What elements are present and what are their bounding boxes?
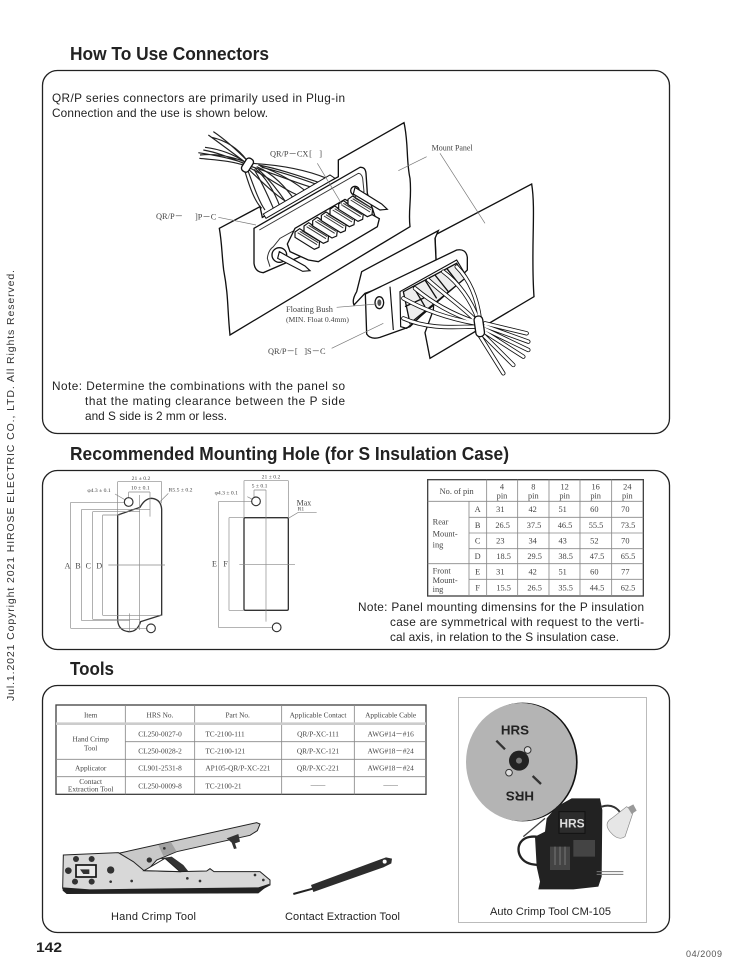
- table: panel mounting dimensions: 42: [529, 505, 537, 514]
- table: panel mounting dimensions: 44.5: [590, 583, 604, 592]
- table: panel mounting dimensions: ing: [433, 540, 443, 549]
- rear mounting labels: A: [65, 561, 71, 570]
- drawing: mounting hole dimensions: [65, 475, 317, 633]
- combination note: that the mating clearance between the P side: [85, 394, 345, 408]
- table: panel mounting dimensions: 42: [529, 567, 537, 576]
- table: panel mounting dimensions: 70: [621, 505, 629, 514]
- table: panel mounting dimensions: 51: [559, 505, 567, 514]
- connector labels: Floating Bush: [286, 305, 334, 314]
- table: panel mounting dimensions: E: [475, 567, 480, 576]
- front mounting labels: 5 ± 0.1: [252, 483, 268, 489]
- rear mounting labels: D: [96, 561, 102, 570]
- table: tool part numbers: TC-2100-111: [205, 730, 245, 739]
- side copyright notice: Jul.1.2021 Copyright 2021 HIROSE ELECTRIC CO., LTD. All Rights Reserved.: [5, 270, 17, 701]
- table: panel mounting dimensions: 77: [621, 567, 629, 576]
- upper connector flange: [254, 167, 377, 273]
- table: panel mounting dimensions: 26.5: [495, 521, 510, 530]
- insulation case note: [358, 600, 644, 644]
- intro text: QR/P series connectors are primarily used in Plug-in: [52, 91, 345, 105]
- lower connector body: [353, 231, 438, 305]
- front mounting labels: E: [212, 560, 217, 569]
- connector labels: ]P－C: [195, 212, 217, 221]
- table: panel mounting dimensions: pin: [497, 491, 508, 500]
- combination note: and S side is 2 mm or less.: [85, 409, 227, 423]
- panel: tools: [42, 686, 670, 932]
- upper mount panel: [219, 123, 411, 335]
- diagram: connector assembly: [195, 123, 534, 373]
- table: panel mounting dimensions: Front: [433, 567, 451, 576]
- table: panel mounting dimensions: 47.5: [590, 552, 604, 561]
- table: panel mounting dimensions: C: [475, 537, 481, 546]
- contact cavities: [295, 196, 373, 249]
- table: panel mounting dimensions: 15.5: [496, 583, 511, 592]
- intro text: [52, 91, 345, 120]
- table: tool part numbers: Extraction Tool: [68, 784, 113, 793]
- table: panel mounting dimensions: D: [475, 552, 481, 561]
- floating bush: [375, 297, 384, 309]
- combination note: Note: Determine the combinations with the panel so: [52, 379, 345, 393]
- table: panel mounting dimensions: 73.5: [621, 521, 635, 530]
- table: tool part numbers: Tool: [84, 744, 97, 753]
- table: tool part numbers: CL250-0009-8: [138, 781, 182, 790]
- caption: auto crimp tool: Auto Crimp Tool CM-105: [490, 906, 611, 918]
- table: tool part numbers: Applicator: [75, 763, 107, 772]
- table: panel mounting dimensions: 18.5: [496, 552, 511, 561]
- table: panel mounting dimensions: 35.5: [558, 583, 573, 592]
- rear mounting dimension lines: [71, 482, 168, 632]
- rear mounting labels: φ4.3 ± 0.1: [87, 488, 111, 494]
- table: panel mounting dimensions: 51: [559, 567, 567, 576]
- table: panel mounting dimensions: 55.5: [589, 521, 603, 530]
- table: panel mounting dimensions: F: [475, 583, 480, 592]
- table: tool part numbers: TC-2100-121: [205, 746, 246, 755]
- lower connector flange: [365, 250, 467, 338]
- panel: recommended mounting hole: [42, 470, 670, 650]
- table: tool part numbers: HRS No.: [147, 710, 174, 719]
- table: panel mounting dimensions: 52: [590, 537, 598, 546]
- table: panel mounting dimensions: 38.5: [558, 552, 573, 561]
- table: panel mounting dimensions: 29.5: [527, 552, 542, 561]
- table: tool part numbers: QR/P-XC-221: [297, 764, 339, 773]
- cable reel: [466, 703, 578, 821]
- front mounting labels: Max: [297, 499, 311, 508]
- front mounting labels: [212, 475, 311, 569]
- rear mounting labels: 21 ± 0.2: [132, 476, 150, 482]
- table: panel mounting dimensions: A: [475, 505, 481, 514]
- cable reel: HRS: [501, 722, 529, 737]
- icon: auto crimp machine: [466, 703, 637, 889]
- insulation case note: case are symmetrical with request to the verti-: [390, 615, 644, 629]
- table: tool part numbers: Hand Crimp: [72, 735, 109, 744]
- insulation case note: cal axis, in relation to the S insulation case.: [390, 630, 619, 644]
- rear mounting labels: C: [86, 561, 91, 570]
- connector shroud: [287, 199, 379, 262]
- table: tool part numbers: AWG#18－#24: [368, 764, 414, 773]
- insulation case note: Note: Panel mounting dimensins for the P insulation: [358, 600, 644, 614]
- connector labels: QR/P－[ ]S－C: [268, 347, 326, 356]
- table: tool part numbers: CL250-0027-0: [138, 730, 182, 739]
- table: panel mounting dimensions: 46.5: [558, 521, 572, 530]
- front mounting labels: 21 ± 0.2: [262, 475, 280, 481]
- front mounting labels: φ4.3 ± 0.1: [215, 490, 238, 496]
- table: panel mounting dimensions: 34: [529, 537, 538, 546]
- table: panel mounting dimensions: 62.5: [621, 583, 635, 592]
- table: panel mounting dimensions: 12: [561, 482, 569, 491]
- wire tie: [474, 315, 485, 337]
- connector labels: QR/P－CX[ ]: [270, 150, 322, 159]
- table: panel mounting dimensions: 31: [496, 505, 504, 514]
- table: panel mounting dimensions: 43: [559, 537, 567, 546]
- connector labels: Mount Panel: [432, 144, 473, 153]
- heading: tools: Tools: [70, 659, 114, 679]
- panel: how to use connectors: [42, 70, 670, 434]
- heading: how to use connectors: How To Use Connectors: [70, 44, 269, 64]
- wire loop: [518, 837, 540, 865]
- table: panel mounting dimensions: ing: [433, 585, 443, 594]
- table: panel mounting dimensions: Mount-: [433, 576, 458, 585]
- table: panel mounting dimensions: [428, 480, 643, 596]
- machine body: [535, 798, 602, 889]
- connector labels: (MIN. Float 0.4mm): [286, 315, 349, 324]
- guide pins: [272, 186, 387, 271]
- rear mounting hole outline: [118, 498, 162, 632]
- table: panel mounting dimensions: 31: [496, 567, 504, 576]
- front mounting labels: R1: [298, 507, 304, 513]
- rear mounting labels: 10 ± 0.1: [131, 485, 150, 491]
- heading: recommended mounting hole: Recommended Mounting Hole (for S Insulation Case): [70, 444, 509, 464]
- table: tool part numbers: Item: [84, 710, 98, 719]
- table: panel mounting dimensions: pin: [528, 491, 539, 500]
- table: tool part numbers: AWG#14－#16: [368, 730, 414, 739]
- table: panel mounting dimensions: pin: [590, 491, 602, 500]
- intro text: Connection and the use is shown below.: [52, 106, 268, 120]
- table: panel mounting dimensions: No. of pin: [440, 487, 474, 496]
- table: panel mounting dimensions: pin: [622, 491, 633, 500]
- table: panel mounting dimensions: 60: [590, 505, 598, 514]
- table: panel mounting dimensions: Rear: [433, 518, 449, 527]
- table: panel mounting dimensions: 24: [623, 482, 632, 491]
- table: panel mounting dimensions: 60: [590, 567, 598, 576]
- front mounting hole outline: [244, 518, 288, 610]
- photo: auto crimp tool: [458, 698, 646, 922]
- table: tool part numbers: Part No.: [225, 710, 250, 719]
- table: tool part numbers: AWG#18－#24: [368, 746, 414, 755]
- table: tool part numbers: Applicable Cable: [365, 710, 416, 719]
- table: panel mounting dimensions: 8: [531, 482, 535, 491]
- table: tool part numbers: Contact: [79, 777, 102, 786]
- icon: hand crimp tool: [63, 823, 271, 894]
- work lamp: [602, 806, 622, 815]
- lower connector wires: [403, 267, 528, 373]
- table: tool part numbers: QR/P-XC-111: [297, 730, 339, 739]
- table: tool part numbers: [56, 705, 426, 794]
- table: panel mounting dimensions: 23: [496, 537, 504, 546]
- cable reel: HRS: [506, 789, 534, 804]
- table: tool part numbers: CL901-2531-8: [138, 764, 182, 773]
- table: tool part numbers: CL250-0028-2: [138, 746, 182, 755]
- icon: auto crimp machine: HRS: [559, 816, 585, 830]
- rear mounting labels: R5.5 ± 0.2: [169, 488, 193, 494]
- lower mount panel: [425, 184, 534, 358]
- rear mounting labels: [65, 476, 193, 570]
- label: QR/P P-C: QR/P－: [156, 212, 183, 221]
- connector labels: [195, 144, 473, 356]
- table: tool part numbers: AP105-QR/P-XC-221: [205, 764, 271, 773]
- table: panel mounting dimensions: 4: [500, 482, 505, 491]
- lower connector cells: [403, 263, 465, 323]
- page number: 142: [36, 939, 62, 955]
- combination note: [52, 379, 345, 423]
- table: tool part numbers: ——: [310, 780, 326, 789]
- icon: contact extraction tool: [293, 857, 392, 894]
- table: tool part numbers: Applicable Contact: [290, 710, 346, 719]
- leader lines: [218, 153, 485, 348]
- front mounting dimension lines: [218, 481, 317, 627]
- table: panel mounting dimensions: B: [475, 521, 481, 530]
- table: panel mounting dimensions: 26.5: [527, 583, 542, 592]
- front mounting labels: F: [223, 560, 228, 569]
- table: tool part numbers: QR/P-XC-121: [297, 746, 339, 755]
- table: panel mounting dimensions: 37.5: [527, 521, 541, 530]
- revision date: 04/2009: [686, 949, 722, 959]
- rear mounting labels: B: [75, 561, 81, 570]
- table: tool part numbers: ——: [382, 780, 399, 789]
- table: panel mounting dimensions: 16: [592, 482, 600, 491]
- table: tool part numbers: TC-2100-21: [205, 781, 242, 790]
- table: panel mounting dimensions: pin: [559, 491, 571, 500]
- table: panel mounting dimensions: Mount-: [433, 529, 458, 538]
- upper connector wires: [198, 132, 327, 210]
- table: panel mounting dimensions: 65.5: [621, 552, 635, 561]
- caption: hand crimp tool: Hand Crimp Tool: [111, 911, 196, 923]
- table: panel mounting dimensions: 70: [621, 537, 629, 546]
- caption: contact extraction tool: Contact Extraction Tool: [285, 911, 400, 923]
